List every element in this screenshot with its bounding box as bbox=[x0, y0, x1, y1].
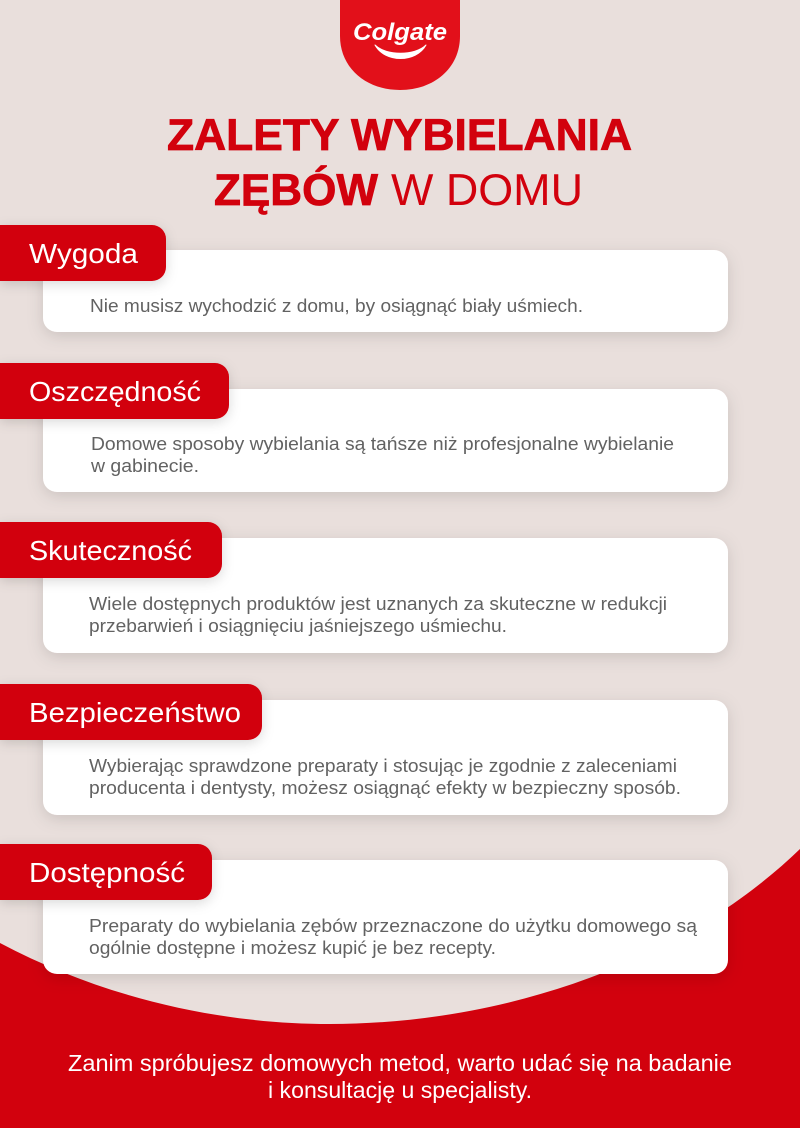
logo: Colgate badge: Colgate bbox=[353, 19, 447, 46]
body text bbox=[90, 433, 674, 476]
footer note: i konsultację u specjalisty. bbox=[268, 1077, 532, 1103]
body text bbox=[89, 915, 698, 958]
panel: Bezpieczeństwo bbox=[0, 684, 728, 815]
title: ZĘBÓW bbox=[214, 165, 378, 215]
panel: Dostępność bbox=[0, 844, 728, 974]
title: W DOMU bbox=[391, 166, 583, 215]
red bottom wave bbox=[0, 849, 800, 1128]
body text: Preparaty do wybielania zębów przeznaczone do użytku domowego są bbox=[89, 915, 698, 936]
card bbox=[43, 700, 728, 815]
body text: Nie musisz wychodzić z domu, by osiągnąć biały uśmiech. bbox=[90, 295, 583, 316]
panel: Oszczędność bbox=[0, 363, 728, 492]
card bbox=[43, 538, 728, 653]
body text: Wiele dostępnych produktów jest uznanych za skuteczne w redukcji bbox=[89, 593, 667, 614]
body text: ogólnie dostępne i możesz kupić je bez recepty. bbox=[89, 937, 496, 958]
footer note bbox=[68, 1050, 732, 1103]
panel: Wygoda bbox=[0, 225, 728, 332]
tab bbox=[0, 844, 212, 900]
title: ZALETY WYBIELANIA bbox=[167, 111, 632, 160]
body text: Wybierając sprawdzone preparaty i stosując je zgodnie z zaleceniami bbox=[89, 755, 677, 776]
card bbox=[43, 860, 728, 974]
body text bbox=[89, 755, 681, 798]
tab bbox=[0, 225, 166, 281]
body text: w gabinecie. bbox=[90, 455, 199, 476]
tab label: Wygoda bbox=[29, 238, 139, 269]
card bbox=[43, 250, 728, 332]
body text bbox=[89, 593, 667, 636]
card bbox=[43, 389, 728, 492]
footer note: Zanim spróbujesz domowych metod, warto udać się na badanie bbox=[68, 1050, 732, 1076]
body text: Domowe sposoby wybielania są tańsze niż profesjonalne wybielanie bbox=[91, 433, 674, 454]
tab bbox=[0, 363, 229, 419]
tab label: Dostępność bbox=[29, 857, 185, 888]
tab label: Oszczędność bbox=[29, 376, 201, 407]
logo: Colgate badge bbox=[340, 0, 460, 90]
title bbox=[167, 111, 632, 215]
tab bbox=[0, 522, 222, 578]
tab label: Bezpieczeństwo bbox=[29, 697, 241, 728]
tab label: Skuteczność bbox=[29, 535, 192, 566]
panel: Skuteczność bbox=[0, 522, 728, 653]
body text: przebarwień i osiągnięciu jaśniejszego uśmiechu. bbox=[89, 615, 507, 636]
tab bbox=[0, 684, 262, 740]
body text: producenta i dentysty, możesz osiągnąć efekty w bezpieczny sposób. bbox=[89, 777, 681, 798]
